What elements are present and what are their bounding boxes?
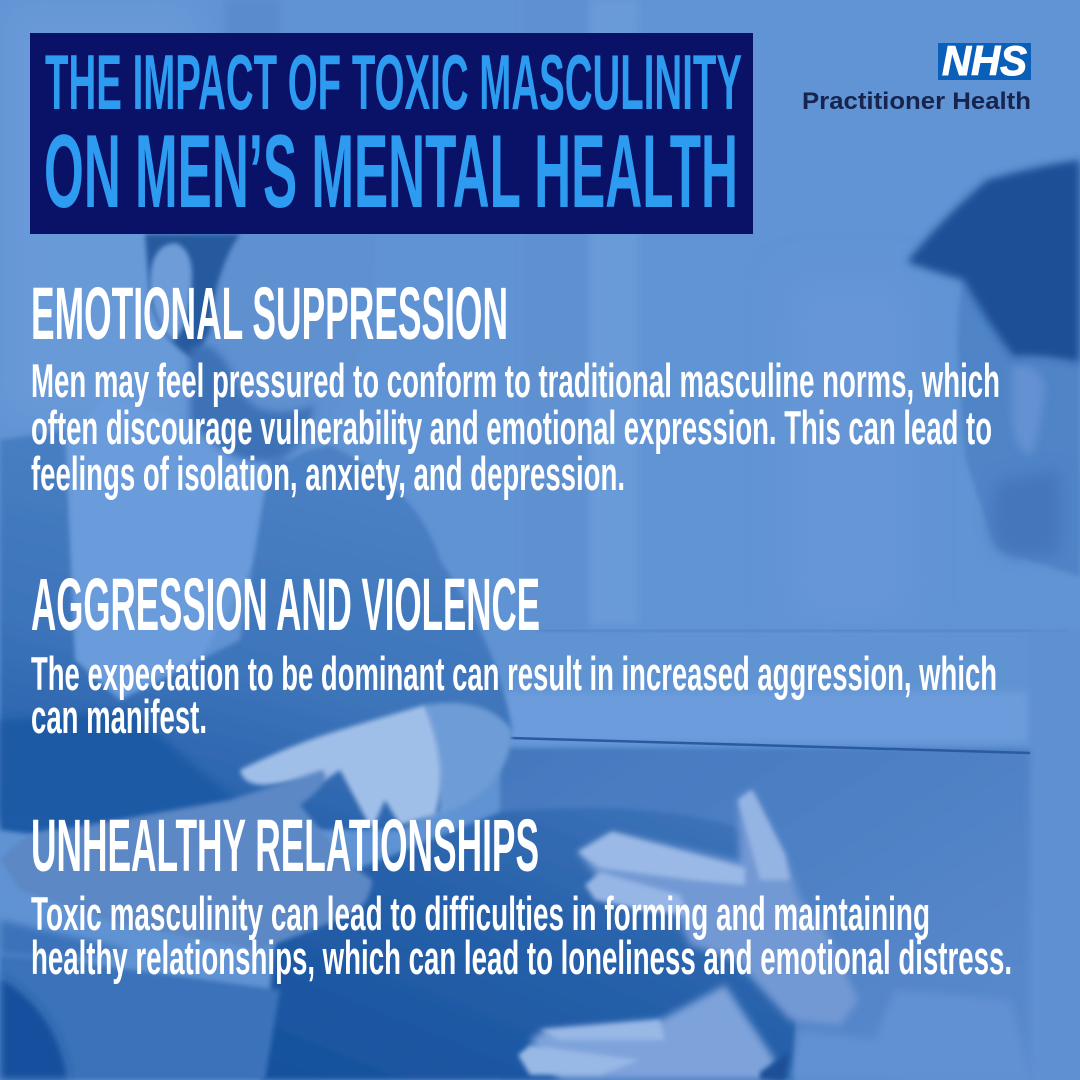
seated man: upper hand	[240, 705, 441, 830]
listening man: hair and face	[957, 280, 1080, 577]
section: aggression and violence	[31, 563, 997, 743]
body text	[31, 887, 1012, 984]
title banner	[30, 33, 753, 234]
section: unhealthy relationships: UNHEALTHY RELATIONSHIPS	[31, 804, 539, 887]
seated man: cuff	[425, 703, 512, 815]
lower wall	[500, 748, 1035, 1080]
body text: can manifest.	[31, 690, 207, 743]
NHS Practitioner Health logo: NHS	[942, 37, 1027, 84]
listening man: lower hand	[530, 985, 775, 1080]
listening man: upper hand	[578, 790, 858, 1025]
seated man: forearm and lower hand	[0, 770, 372, 950]
body text	[31, 354, 1000, 500]
window sill	[540, 630, 1068, 632]
section: aggression and violence: AGGRESSION AND VIOLENCE	[31, 563, 540, 646]
listening man: shirt sleeve	[790, 990, 1030, 1080]
section: emotional suppression: EMOTIONAL SUPPRESSION	[31, 272, 508, 355]
NHS Practitioner Health logo: Practitioner Health	[802, 88, 1031, 115]
body text: feelings of isolation, anxiety, and depression.	[31, 447, 625, 500]
section: emotional suppression	[31, 272, 1000, 500]
section: unhealthy relationships	[31, 804, 1012, 984]
sofa	[260, 808, 795, 1080]
seated man: lower cardigan	[0, 955, 280, 1080]
NHS Practitioner Health logo	[802, 37, 1031, 115]
seated man: head	[190, 234, 375, 460]
seated man: T-shirt	[60, 395, 290, 720]
body text	[31, 647, 997, 743]
seated man: left sleeve and cardigan	[0, 430, 512, 860]
